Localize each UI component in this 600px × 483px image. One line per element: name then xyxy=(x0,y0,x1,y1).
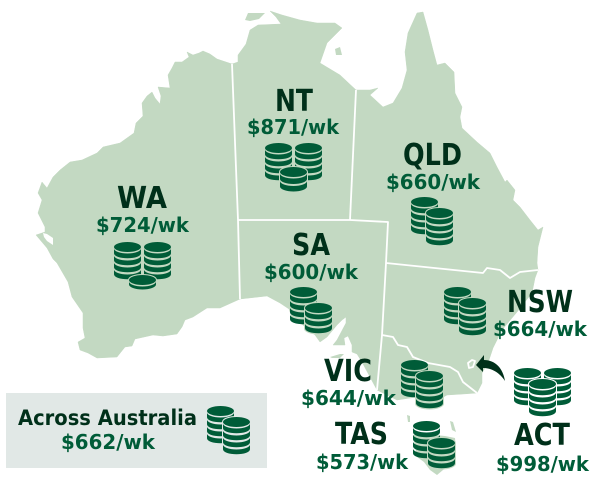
TAS value: $573/wk xyxy=(316,450,409,474)
VIC coins xyxy=(401,360,443,408)
WA label: WA xyxy=(117,181,168,216)
ACT label: ACT xyxy=(514,418,570,453)
WA value: $724/wk xyxy=(96,213,190,237)
WA xyxy=(96,181,190,290)
NT label: NT xyxy=(275,84,313,119)
NT value: $871/wk xyxy=(247,115,340,139)
NSW xyxy=(444,285,588,341)
NT xyxy=(247,84,340,192)
NSW value: $664/wk xyxy=(493,317,588,341)
Shark Bay xyxy=(43,233,53,245)
SA coins xyxy=(290,287,332,334)
panel value: $662/wk xyxy=(61,430,156,454)
TAS xyxy=(316,417,455,474)
ACT value: $998/wk xyxy=(496,452,590,476)
arrow: ACT pointer xyxy=(476,355,505,381)
TAS label: TAS xyxy=(335,417,388,452)
panel: Across Australia xyxy=(6,393,267,468)
panel heading: Across Australia xyxy=(18,406,197,430)
TAS coins xyxy=(413,421,455,468)
QLD coins xyxy=(411,197,453,246)
NSW label: NSW xyxy=(507,285,573,320)
Kangaroo Island xyxy=(330,354,344,358)
QLD xyxy=(386,138,481,246)
VIC value: $644/wk xyxy=(301,386,397,410)
SA xyxy=(264,228,359,334)
SA value: $600/wk xyxy=(264,260,359,284)
VIC label: VIC xyxy=(324,354,372,389)
panel background xyxy=(6,393,267,468)
NT coins xyxy=(265,143,322,192)
panel coins xyxy=(207,406,250,454)
VIC xyxy=(301,354,443,410)
WA coins xyxy=(114,242,171,290)
ACT coins xyxy=(514,368,571,416)
King Island xyxy=(407,415,410,422)
SA label: SA xyxy=(292,228,331,263)
ACT xyxy=(496,368,590,476)
Tasmania xyxy=(413,434,456,475)
QLD value: $660/wk xyxy=(386,170,481,194)
QLD label: QLD xyxy=(403,138,462,173)
NSW coins xyxy=(444,287,486,336)
Tiwi Islands xyxy=(245,13,265,21)
Flinders Island xyxy=(450,421,456,432)
Groote Eylandt xyxy=(335,47,342,55)
state borders xyxy=(232,64,538,393)
mainland xyxy=(36,11,543,407)
